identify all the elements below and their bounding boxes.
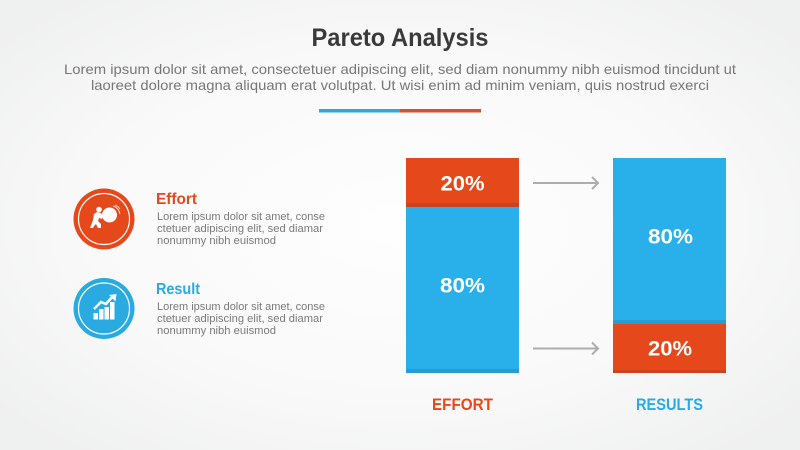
bar: results <box>613 158 726 373</box>
text: effort description: ctetuer adipiscing elit, sed diamar <box>157 223 323 235</box>
text: effort description: nonummy nibh euismod <box>157 235 276 247</box>
segment: effort 20%: 20% <box>440 172 485 196</box>
legend item: result <box>74 278 325 339</box>
segment: results 80%: 80% <box>648 226 693 248</box>
bar: effort <box>406 158 519 373</box>
segment: results 20% <box>613 324 726 373</box>
segment: effort 20% <box>406 158 519 207</box>
text: result description: ctetuer adipiscing elit, sed diamar <box>157 313 323 325</box>
label: effort: EFFORT <box>432 395 494 414</box>
text: effort description <box>157 211 325 247</box>
icon: rising bar chart <box>74 278 134 339</box>
subtitle text: Lorem ipsum dolor sit amet, consectetuer adipiscing elit, sed diam nonummy nibh euismod tincidunt ut <box>64 61 736 77</box>
legend item: effort <box>74 188 325 250</box>
segment: results 20%: 20% <box>648 338 692 360</box>
segment: results 80% <box>613 158 726 324</box>
heading: effort: Effort <box>156 191 197 208</box>
segment: effort 80%: 80% <box>440 274 485 298</box>
text: result description: Lorem ipsum dolor sit amet, conse <box>157 301 325 313</box>
label: results: RESULTS <box>636 395 703 414</box>
segment: effort 80% <box>406 207 519 373</box>
subtitle text: laoreet dolore magna aliquam erat volutpat. Ut wisi enim ad minim veniam, quis nostrud exerci <box>91 77 709 93</box>
arrow: bottom <box>533 342 598 354</box>
text: result description: nonummy nibh euismod <box>157 325 276 337</box>
subtitle text <box>64 61 736 93</box>
text: result description <box>157 301 325 337</box>
title underline <box>319 109 481 112</box>
title: Pareto Analysis <box>312 24 488 52</box>
text: effort description: Lorem ipsum dolor sit amet, conse <box>157 211 325 223</box>
heading: result: Result <box>156 281 200 298</box>
arrow: top <box>533 177 598 189</box>
icon: person pushing boulder <box>74 188 134 250</box>
